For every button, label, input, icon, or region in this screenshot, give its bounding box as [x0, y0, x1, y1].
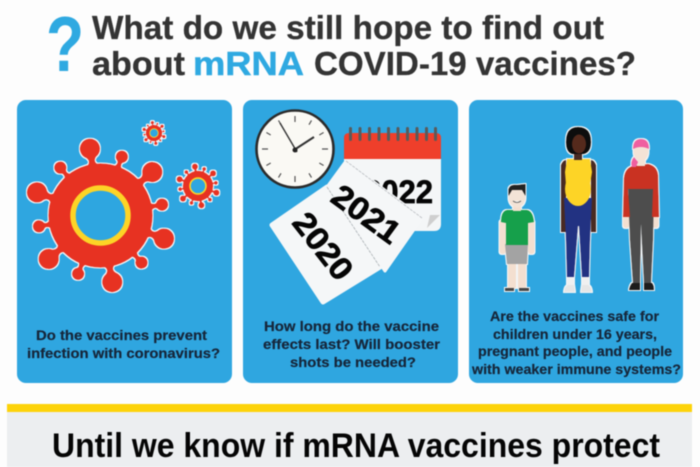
icon: large coronavirus	[24, 137, 177, 294]
icon: medium coronavirus	[176, 163, 220, 209]
panel text: safety question: Are the vaccines safe for	[490, 308, 660, 324]
icon: calendar: 2022	[364, 174, 433, 210]
panel text: duration question: How long do the vaccine	[264, 318, 439, 334]
panel text: safety question	[471, 308, 681, 377]
panel: safety	[469, 100, 683, 383]
calendar page: 2020	[272, 187, 380, 302]
figure: child	[500, 184, 534, 291]
figure: person with headscarf	[623, 139, 659, 290]
panel text: infection question: Do the vaccines prevent	[36, 327, 207, 343]
panel text: duration question: shots be needed?	[290, 354, 416, 370]
bottom banner	[7, 404, 692, 467]
panel text: duration question: effects last? Will booster	[263, 336, 441, 352]
banner text: Until we know if mRNA vaccines protect	[52, 427, 660, 465]
title heading: about	[92, 46, 185, 83]
panel text: safety question: pregnant people, and people	[478, 343, 672, 359]
title heading: mRNA	[193, 46, 304, 83]
panel text: infection question	[27, 327, 220, 361]
panel text: duration question	[263, 318, 441, 370]
icon: calendar	[344, 127, 441, 231]
figure: pregnant person	[561, 127, 596, 292]
panel text: infection question: infection with coronavirus?	[27, 345, 220, 361]
calendar page label: 2021: 2021	[325, 177, 408, 251]
calendar page: 2020: 2020	[285, 205, 361, 287]
title heading	[92, 10, 636, 83]
title heading: What do we still hope to find out	[92, 10, 604, 47]
calendar page: 2021	[327, 161, 422, 271]
title: question mark icon: ?	[46, 0, 84, 88]
icon: clock	[256, 110, 334, 188]
panel text: safety question: children under 16 years,	[493, 326, 657, 342]
panel: infection	[17, 100, 232, 383]
icon: small coronavirus	[142, 121, 166, 145]
panel: duration	[243, 100, 458, 383]
panel text: safety question: with weaker immune systems?	[471, 361, 681, 377]
title heading: COVID-19 vaccines?	[314, 46, 636, 83]
